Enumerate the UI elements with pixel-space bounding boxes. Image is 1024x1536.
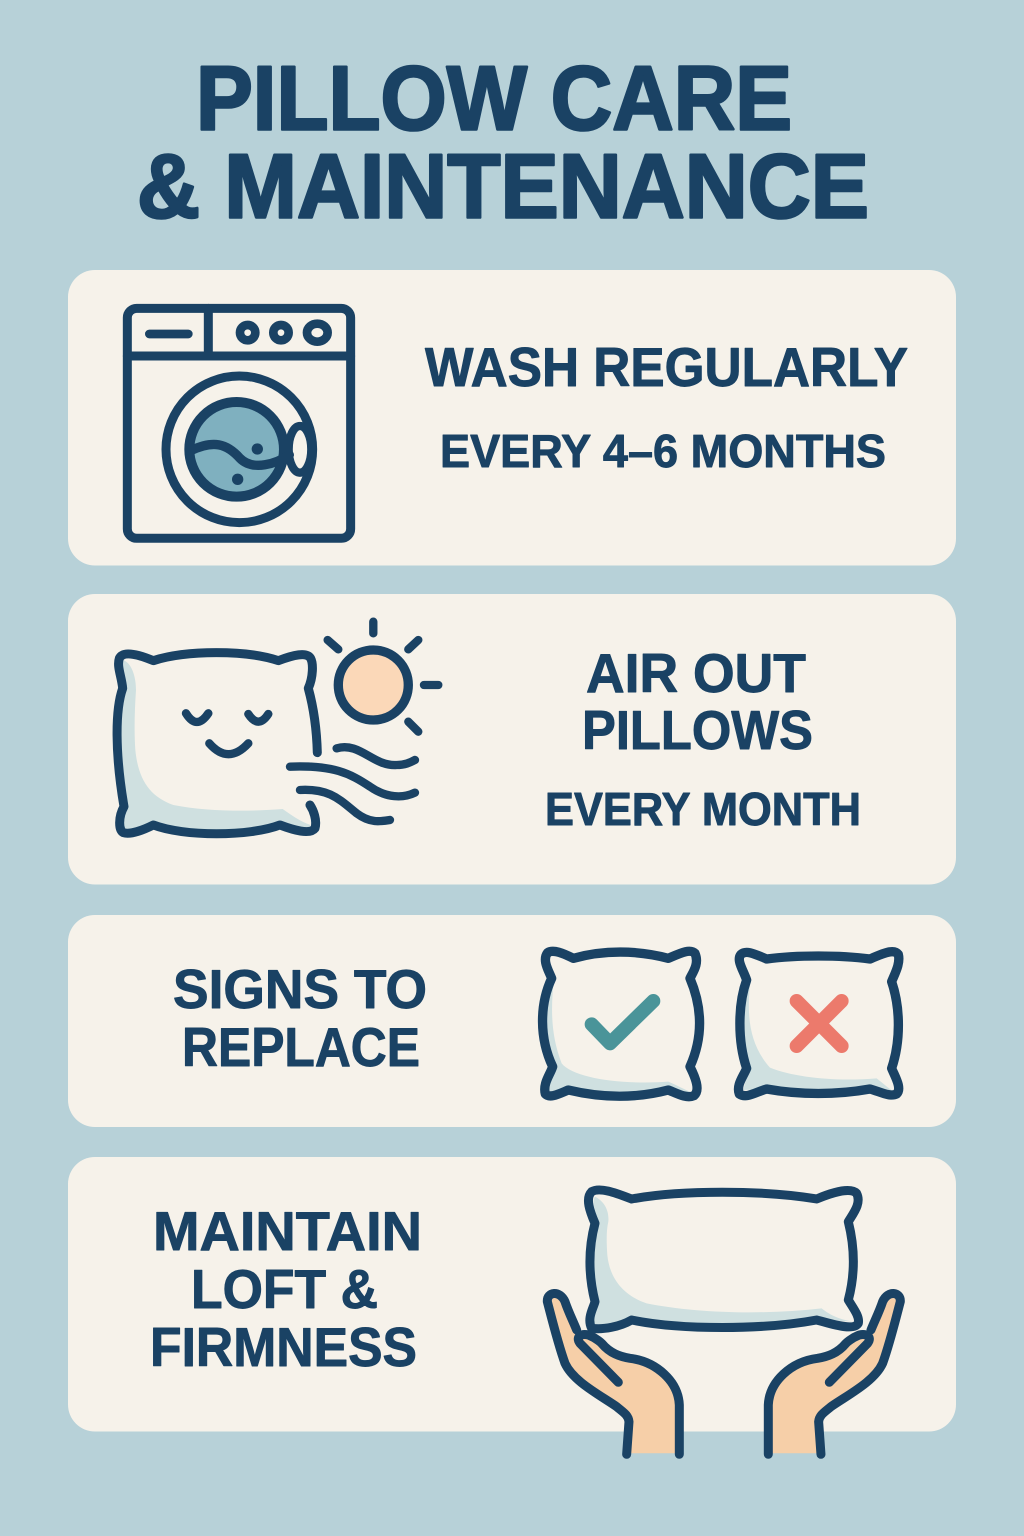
panel: air out pillows bbox=[68, 594, 956, 884]
heading: signs to: SIGNS TO bbox=[173, 958, 427, 1020]
title: & MAINTENANCE bbox=[137, 136, 869, 238]
panel: maintain loft and firmness bbox=[68, 1157, 956, 1454]
icon: hands holding pillow bbox=[547, 1190, 900, 1454]
icon: worn pillow with cross bbox=[738, 952, 899, 1096]
text: every month: EVERY MONTH bbox=[545, 783, 861, 835]
heading: replace: REPLACE bbox=[182, 1016, 420, 1078]
panel: signs to replace bbox=[68, 915, 956, 1127]
text: every 4-6 months: EVERY 4–6 MONTHS bbox=[440, 425, 886, 477]
heading: loft and: LOFT & bbox=[191, 1258, 378, 1320]
icon: washing machine bbox=[127, 308, 351, 538]
card background bbox=[68, 270, 956, 566]
title bbox=[137, 48, 869, 238]
pillow bbox=[588, 1190, 859, 1329]
icon: good pillow with check bbox=[543, 951, 699, 1097]
heading: maintain: MAINTAIN bbox=[153, 1200, 422, 1262]
icon: pillow with sun and breeze bbox=[117, 622, 438, 834]
title: PILLOW CARE bbox=[196, 48, 792, 150]
left hand bbox=[547, 1294, 679, 1454]
card background bbox=[68, 1157, 956, 1432]
heading: firmness: FIRMNESS bbox=[150, 1316, 417, 1378]
heading: wash regularly: WASH REGULARLY bbox=[425, 336, 908, 398]
heading: pillows: PILLOWS bbox=[582, 699, 813, 761]
heading: air out: AIR OUT bbox=[586, 642, 806, 704]
card background bbox=[68, 594, 956, 884]
panel: wash regularly bbox=[68, 270, 956, 566]
card background bbox=[68, 915, 956, 1127]
right hand bbox=[768, 1294, 900, 1454]
